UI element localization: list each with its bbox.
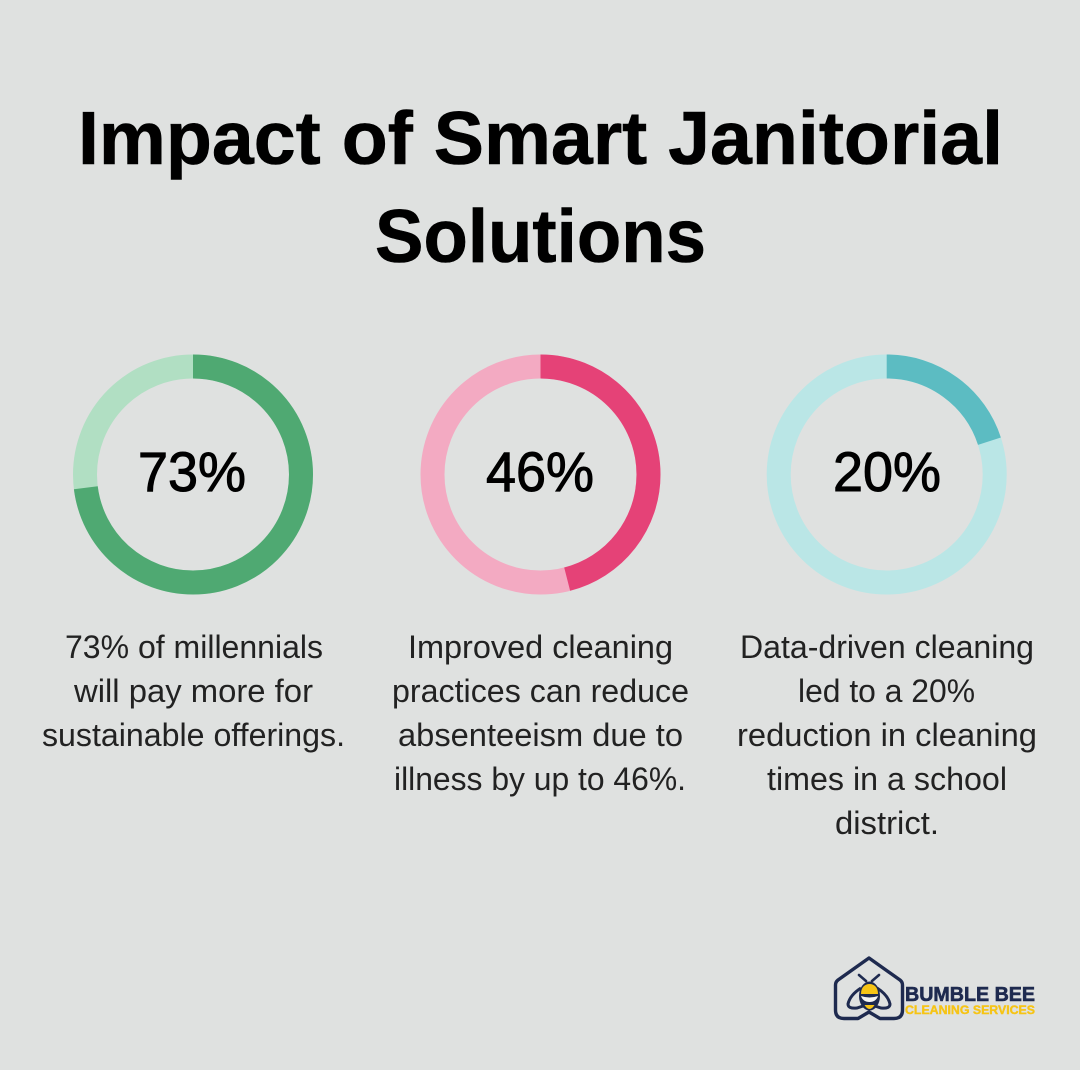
description: millennials: will pay more for <box>73 673 313 709</box>
description: millennials: sustainable offerings. <box>42 717 345 753</box>
title <box>78 96 1003 278</box>
donut chart: 46% <box>432 366 648 582</box>
description: absenteeism <box>392 629 689 797</box>
stat: 20%: 20% <box>833 440 941 503</box>
description: absenteeism: absenteeism due to <box>398 717 683 753</box>
logo: Bumble Bee Cleaning Services <box>836 958 1035 1018</box>
logo tagline: CLEANING SERVICES <box>905 1003 1035 1017</box>
description: cleaning times: Data-driven cleaning <box>740 629 1034 665</box>
donut chart: 20% <box>779 366 995 582</box>
description: cleaning times <box>737 629 1037 841</box>
description: cleaning times: times in a school <box>767 761 1007 797</box>
panel: 73% millennials <box>42 366 345 753</box>
panel: 20% cleaning times <box>737 366 1037 841</box>
title: Solutions <box>375 194 706 278</box>
icon: bee in house <box>836 958 902 1018</box>
title: Impact of Smart Janitorial <box>78 96 1003 180</box>
stat: 73%: 73% <box>138 440 246 503</box>
description: cleaning times: reduction in cleaning <box>737 717 1037 753</box>
logo name: BUMBLE BEE <box>905 984 1035 1006</box>
description: cleaning times: led to a 20% <box>798 673 975 709</box>
donut chart: 73% <box>85 366 301 582</box>
stat: 46%: 46% <box>486 440 594 503</box>
description: absenteeism: illness by up to 46%. <box>394 761 686 797</box>
description: absenteeism: practices can reduce <box>392 673 689 709</box>
description: cleaning times: district. <box>835 805 939 841</box>
description: millennials <box>42 629 345 753</box>
description: absenteeism: Improved cleaning <box>408 629 673 665</box>
panel: 46% absenteeism <box>392 366 689 797</box>
description: millennials: 73% of millennials <box>65 629 323 665</box>
